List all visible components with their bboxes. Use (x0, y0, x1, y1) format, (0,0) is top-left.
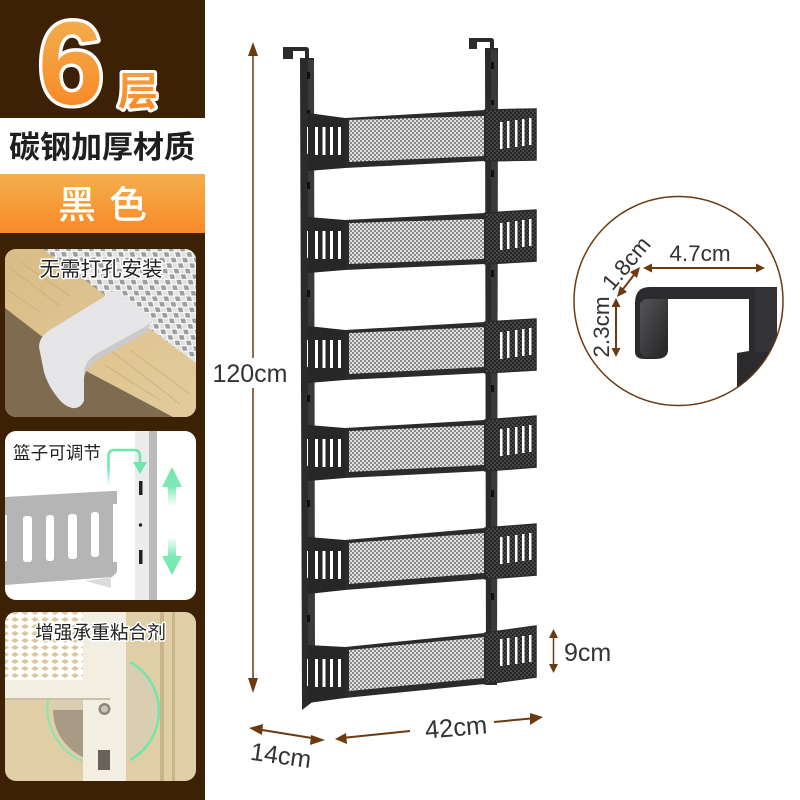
heading: 6 layers (38, 0, 158, 130)
basket 1 (307, 109, 536, 171)
basket 5 (307, 524, 536, 594)
panel: adjustable basket: 篮子可调节 (13, 443, 101, 463)
dimension: 4.7cm: 4.7cm (669, 241, 731, 266)
right post with hook (469, 38, 498, 685)
basket 6 (307, 626, 536, 703)
width dimension: 42cm: 42cm (424, 711, 488, 745)
panel: reinforced adhesive (5, 612, 196, 781)
material label (0, 118, 205, 174)
heading: 6 layers: 6 (38, 0, 104, 130)
dimension: 2.3cm: 2.3cm (589, 296, 614, 358)
left post with hook (283, 47, 315, 710)
dimension: 1.8cm: 1.8cm (597, 232, 656, 295)
hook close-up (635, 287, 777, 387)
width dimension: 42cm (335, 711, 543, 745)
colour label: 黑色 (58, 185, 160, 227)
hook detail circle (574, 196, 783, 420)
colour label (0, 174, 205, 233)
depth dimension: 14cm: 14cm (249, 738, 313, 774)
panel: no drilling installation: 无需打孔安装 (40, 258, 162, 281)
material label: 碳钢加厚材质 (9, 130, 195, 165)
height dimension: 120cm: 120cm (212, 360, 288, 388)
panel: adjustable basket (5, 431, 196, 600)
depth dimension: 14cm (249, 724, 325, 774)
dimension: 4.7cm (643, 241, 765, 272)
basket height dimension: 9cm: 9cm (564, 639, 611, 667)
heading: 6 layers: 层 (118, 70, 158, 114)
left column background (0, 0, 205, 800)
height dimension: 120cm (212, 42, 288, 693)
panel: no drilling installation (5, 249, 196, 417)
basket 4 (307, 416, 536, 481)
basket 2 (307, 210, 536, 273)
basket 3 (307, 319, 536, 383)
basket height dimension: 9cm (549, 629, 611, 673)
panel: reinforced adhesive: 增强承重粘合剂 (35, 622, 166, 643)
